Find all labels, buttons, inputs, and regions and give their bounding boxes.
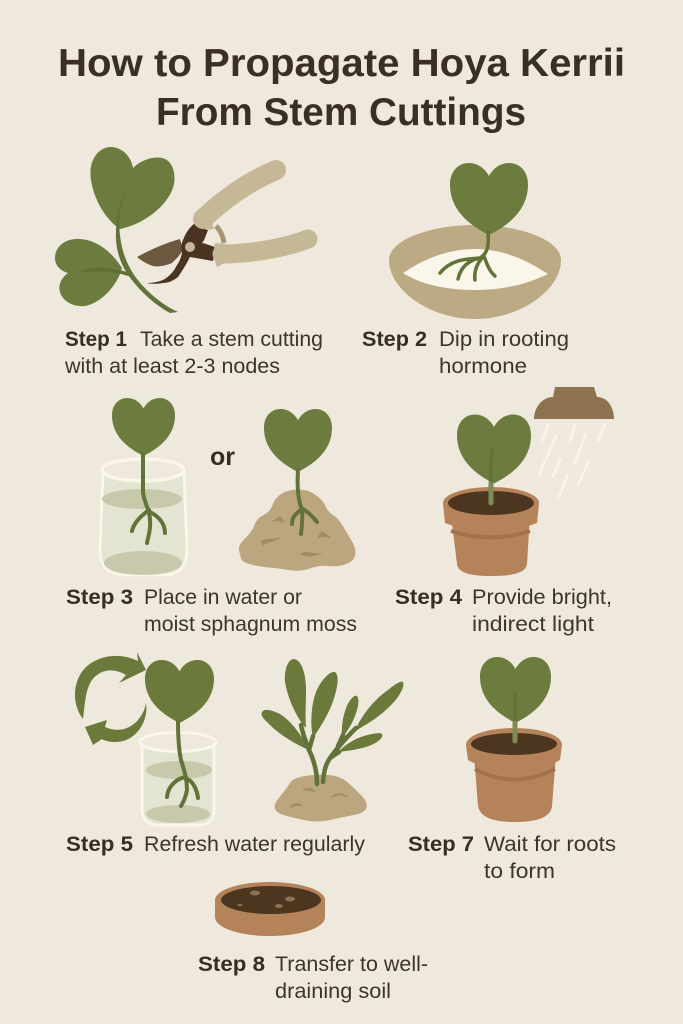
caption: step 3 <box>66 586 357 636</box>
caption: step 3: Step 3 <box>66 586 133 609</box>
caption: step 1: Take a stem cutting <box>140 328 323 351</box>
panel: step 3 <box>66 398 357 636</box>
panel: step 4 <box>395 387 614 636</box>
icon: refresh arrows <box>75 652 146 745</box>
panel: step 5 <box>66 652 366 856</box>
icon: bowl of rooting hormone <box>389 225 561 319</box>
caption: step 7: Step 7 <box>408 833 474 856</box>
caption: step 1: Step 1 <box>65 328 127 351</box>
caption: step 3: Place in water or <box>144 586 302 609</box>
caption: step 4 <box>395 586 612 636</box>
caption: step 5: Step 5 <box>66 833 133 856</box>
caption: step 4: Provide bright, <box>472 586 612 609</box>
panel: step 1 <box>55 147 323 378</box>
caption: step 8: Step 8 <box>198 953 265 976</box>
icon: potted plant <box>443 414 539 576</box>
caption: step 8: Transfer to well- <box>275 953 428 976</box>
caption: step 1: with at least 2-3 nodes <box>64 355 280 378</box>
icon: cutting in glass <box>140 660 216 825</box>
panel: step 6 illustration <box>262 659 403 822</box>
label: or: or <box>210 443 235 471</box>
icon: soil mound <box>275 775 367 822</box>
icon: leaf with roots <box>440 163 528 280</box>
caption: step 7: to form <box>484 860 555 883</box>
icon: dish of soil <box>215 882 325 936</box>
title: How to Propagate Hoya Kerrii <box>58 42 625 85</box>
icon: light fixture <box>534 387 614 419</box>
caption: step 4: indirect light <box>472 613 594 636</box>
caption: step 8 <box>198 953 428 1003</box>
icon: soil marks <box>289 788 349 808</box>
caption: step 2: hormone <box>439 355 527 378</box>
caption: step 7: Wait for roots <box>484 833 616 856</box>
icon: pruning shears <box>137 170 308 284</box>
icon: hoya cutting <box>55 147 178 313</box>
icon: potted plant <box>466 657 562 822</box>
caption: step 2: Step 2 <box>362 328 427 351</box>
caption: step 5: Refresh water regularly <box>144 833 366 856</box>
title <box>58 42 625 134</box>
caption: step 8: draining soil <box>275 980 391 1003</box>
icon: sprouting leaves <box>262 659 403 784</box>
icon: light rays <box>539 424 605 497</box>
panel: step 7 <box>408 657 616 883</box>
caption: step 3: moist sphagnum moss <box>144 613 357 636</box>
icon: cutting in glass of water <box>100 398 187 575</box>
panel: step 8 <box>198 882 428 1003</box>
icon: cutting in sphagnum moss <box>239 409 356 571</box>
caption: step 2: Dip in rooting <box>439 328 569 351</box>
caption: step 7 <box>408 833 616 883</box>
panel: step 2 <box>362 163 569 378</box>
title: From Stem Cuttings <box>156 91 526 134</box>
caption: step 1 <box>64 328 323 378</box>
caption: step 2 <box>362 328 569 378</box>
caption: step 4: Step 4 <box>395 586 462 609</box>
